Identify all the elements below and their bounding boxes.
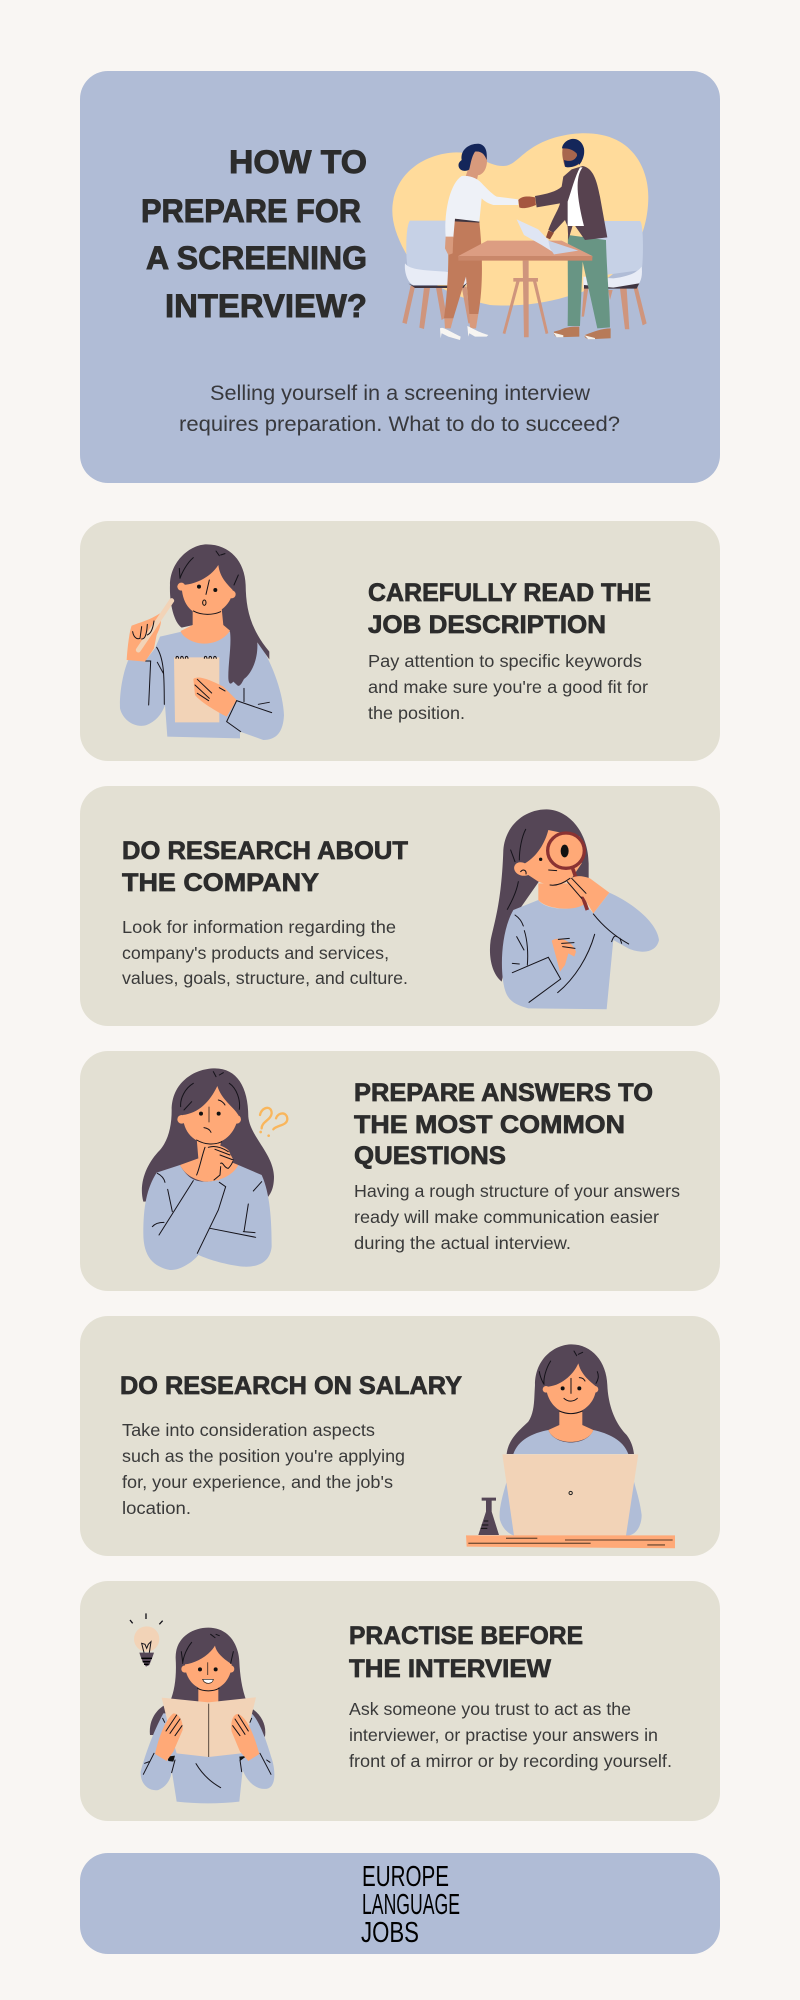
heading: THE COMPANY — [122, 869, 319, 897]
intro text: Selling yourself in a screening interview — [210, 381, 590, 405]
panel: do research on salary — [80, 1316, 720, 1556]
illustration: woman at laptop — [466, 1344, 675, 1548]
heading — [354, 1079, 653, 1170]
illustration: woman reading with light bulb — [130, 1613, 274, 1803]
right chair — [582, 221, 647, 329]
heading: THE INTERVIEW — [349, 1655, 551, 1683]
heading: THE MOST COMMON — [354, 1111, 625, 1139]
panel: do research about the company — [80, 786, 720, 1026]
title: HOW TO — [229, 144, 367, 180]
laptop — [517, 219, 578, 254]
title: PREPARE FOR — [141, 193, 361, 229]
icon: question marks — [259, 1108, 287, 1137]
illustration: handshake at a table — [392, 133, 648, 340]
logo: LANGUAGE — [362, 1889, 460, 1921]
man — [518, 139, 611, 339]
body text: Pay attention to specific keywords — [368, 651, 642, 671]
body text: such as the position you're applying — [122, 1446, 405, 1466]
heading: DO RESEARCH ON SALARY — [120, 1372, 462, 1400]
panel: practise before the interview — [80, 1581, 720, 1821]
body text — [354, 1181, 680, 1253]
body text: for, your experience, and the job's — [122, 1472, 393, 1492]
title: INTERVIEW? — [165, 288, 367, 324]
body text: interviewer, or practise your answers in — [349, 1725, 658, 1745]
icon: light bulb — [130, 1613, 163, 1667]
body text: and make sure you're a good fit for — [368, 677, 648, 697]
heading: DO RESEARCH ABOUT — [122, 837, 408, 865]
body text: Having a rough structure of your answers — [354, 1181, 680, 1201]
body text: the position. — [368, 703, 465, 723]
logo: JOBS — [361, 1917, 419, 1949]
yellow blob — [392, 133, 648, 306]
heading — [349, 1622, 583, 1683]
body text: front of a mirror or by recording yourself. — [349, 1751, 672, 1771]
heading: CAREFULLY READ THE — [368, 579, 651, 607]
panel: intro header — [80, 71, 720, 483]
body text: Take into consideration aspects — [122, 1420, 375, 1440]
panel: carefully read the job description — [80, 521, 720, 761]
left chair — [402, 221, 471, 329]
title — [141, 144, 367, 324]
table — [458, 241, 592, 337]
body text — [122, 917, 408, 988]
heading — [122, 837, 408, 897]
heading: PRACTISE BEFORE — [349, 1622, 583, 1650]
body text: company's products and services, — [122, 943, 389, 963]
body text: Ask someone you trust to act as the — [349, 1699, 631, 1719]
heading: QUESTIONS — [354, 1142, 506, 1170]
body text — [368, 651, 648, 723]
body text — [349, 1699, 672, 1771]
panel: footer logo — [80, 1853, 720, 1954]
body text: values, goals, structure, and culture. — [122, 968, 408, 988]
logo: EUROPE — [362, 1861, 449, 1893]
body text: during the actual interview. — [354, 1233, 571, 1253]
logo — [361, 1861, 460, 1949]
body text: ready will make communication easier — [354, 1207, 659, 1227]
intro text: requires preparation. What to do to succeed? — [179, 412, 620, 436]
body text — [122, 1420, 405, 1518]
heading — [368, 579, 651, 639]
illustration: thinking woman — [142, 1068, 287, 1270]
illustration: woman with magnifying glass — [490, 809, 659, 1009]
body text: location. — [122, 1498, 191, 1518]
body text: Look for information regarding the — [122, 917, 396, 937]
woman — [440, 144, 518, 340]
intro text — [179, 381, 620, 436]
panel: prepare answers to common questions — [80, 1051, 720, 1291]
illustration: woman with notepad — [120, 544, 284, 740]
title: A SCREENING — [146, 240, 367, 276]
heading: PREPARE ANSWERS TO — [354, 1079, 653, 1107]
heading: JOB DESCRIPTION — [368, 611, 606, 639]
